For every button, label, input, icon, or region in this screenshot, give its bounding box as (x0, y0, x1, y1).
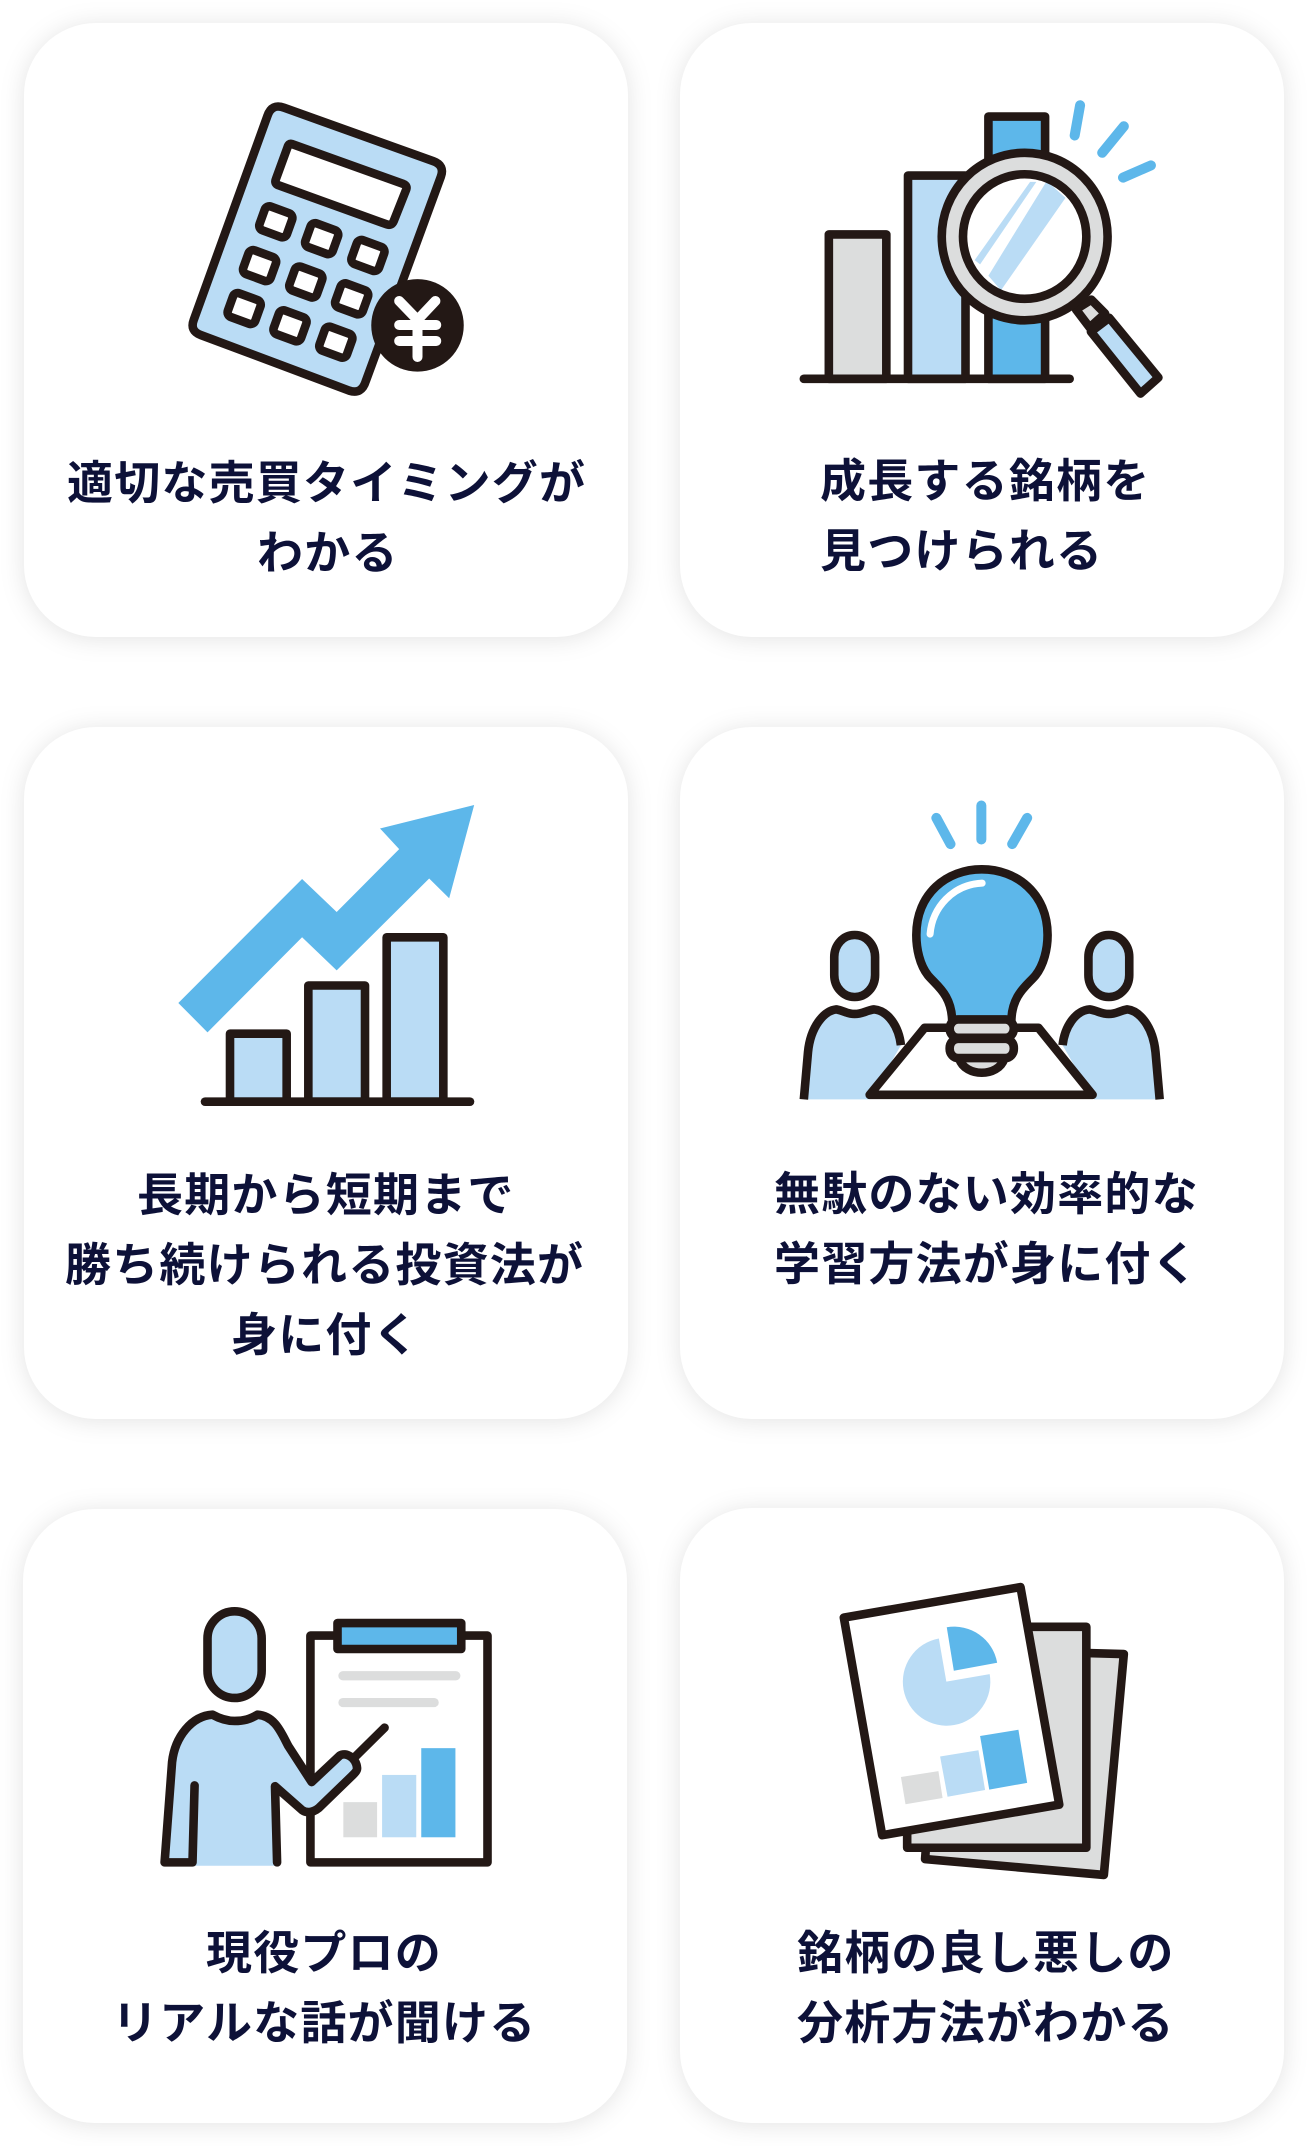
panel: real talk card (23, 1509, 627, 2123)
icon: calculator with yen coin (193, 107, 464, 392)
panel: efficient learning card (680, 727, 1284, 1419)
icon: light bulb with two people (804, 806, 1160, 1099)
icon: stacked report sheets (844, 1587, 1124, 1875)
panel: timing card (24, 23, 628, 637)
icon: rising arrow and bars (178, 805, 474, 1102)
heading: stock analysis: 分析方法がわかる (797, 1997, 1175, 2049)
heading: investing method: 身に付く (231, 1309, 420, 1361)
heading: growth stocks: 見つけられる (820, 525, 1103, 577)
heading: investing method (65, 1169, 584, 1361)
icon: bar chart with magnifier (804, 105, 1158, 394)
panel: growth stocks card (680, 23, 1284, 637)
panel: investing method card (24, 727, 628, 1419)
icon: presenter with clipboard (165, 1611, 488, 1866)
heading: timing: 適切な売買タイミングが (67, 457, 586, 509)
heading: growth stocks (820, 455, 1150, 577)
heading: efficient learning: 学習方法が身に付く (774, 1238, 1199, 1290)
heading: efficient learning (774, 1168, 1199, 1290)
heading: stock analysis: 銘柄の良し悪しの (797, 1927, 1175, 1979)
heading: timing (67, 457, 586, 579)
heading: real talk: 現役プロの (206, 1927, 442, 1979)
heading: real talk: リアルな話が聞ける (112, 1997, 536, 2049)
panel: stock analysis card (680, 1508, 1284, 2123)
heading: investing method: 長期から短期まで (137, 1169, 515, 1221)
heading: growth stocks: 成長する銘柄を (820, 455, 1150, 507)
heading: stock analysis (797, 1927, 1175, 2049)
heading: investing method: 勝ち続けられる投資法が (65, 1239, 584, 1291)
heading: efficient learning: 無駄のない効率的な (774, 1168, 1199, 1220)
heading: timing: わかる (257, 527, 399, 579)
heading: real talk (112, 1927, 536, 2049)
